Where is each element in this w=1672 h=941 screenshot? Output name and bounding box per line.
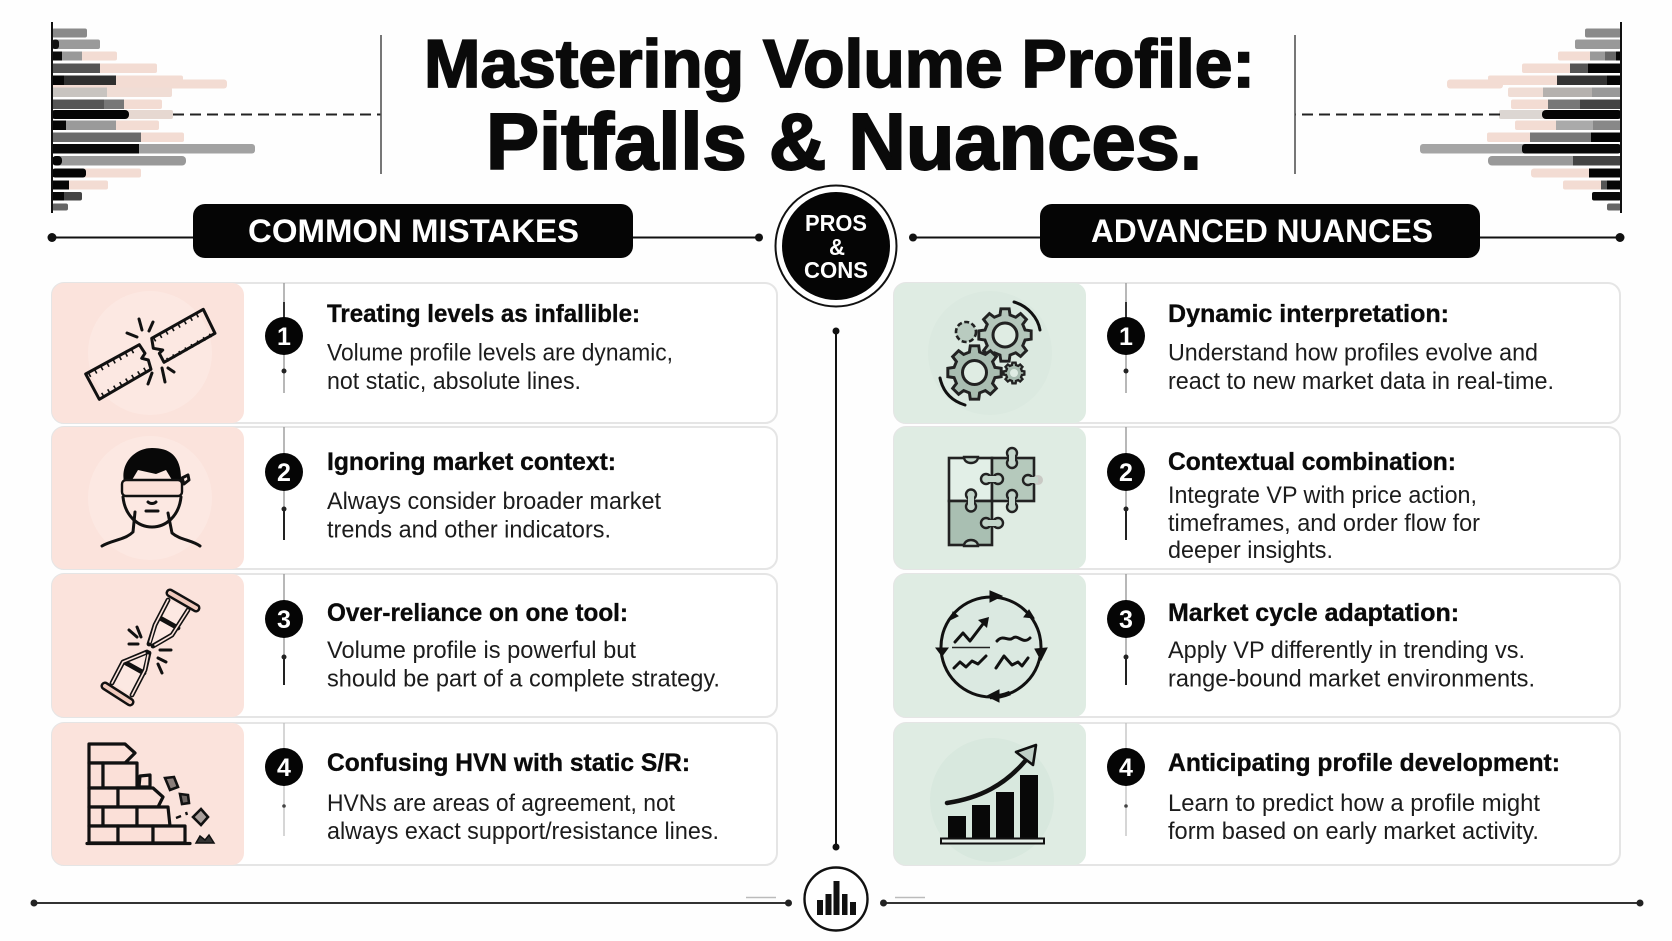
text: mistake 4: always exact support/resistance lines.: [327, 818, 719, 845]
text: mistake 1: Volume profile levels are dynamic,: [327, 340, 673, 366]
badge: pros and cons: [776, 186, 896, 306]
text: mistake 1: [327, 300, 673, 395]
title: Mastering Volume Profile:: [424, 26, 1255, 102]
icon: footer volume bars: [804, 868, 868, 930]
text: mistake 1: not static, absolute lines.: [327, 368, 581, 395]
text: nuance 1: Dynamic interpretation:: [1168, 300, 1449, 328]
text: mistake 3: should be part of a complete strategy.: [327, 666, 720, 692]
centre vertical divider: [832, 328, 840, 850]
icon: gears: [928, 291, 1052, 415]
text: nuance 1: Understand how profiles evolve and: [1168, 340, 1538, 366]
text: nuance 2: [1168, 448, 1480, 564]
panel: nuance 3: [894, 574, 1620, 717]
text: mistake 4: HVNs are areas of agreement, not: [327, 790, 675, 817]
panel: nuance 4: [894, 723, 1620, 865]
number 4: 4: [277, 754, 291, 782]
icon: broken crutch: [105, 593, 196, 702]
footer rule: right: [880, 898, 1644, 906]
title: [424, 26, 1255, 186]
number 2: 2: [277, 459, 291, 487]
icon: puzzle pieces: [949, 448, 1043, 546]
badge: pros and cons: &: [829, 234, 845, 260]
text: mistake 3: [327, 599, 720, 692]
text: nuance 3: range-bound market environments.: [1168, 666, 1535, 692]
text: nuance 3: Market cycle adaptation:: [1168, 599, 1459, 627]
icon: blindfolded head: [88, 436, 212, 560]
number 3: [265, 574, 303, 685]
panel: nuance 1: [894, 283, 1620, 423]
text: nuance 2: Integrate VP with price action,: [1168, 482, 1477, 509]
number 3: [1107, 574, 1145, 685]
volume profile chart: right: [1420, 22, 1622, 213]
text: nuance 2: deeper insights.: [1168, 537, 1333, 564]
icon: crumbling wall: [87, 744, 214, 844]
number 2: 2: [1119, 459, 1133, 487]
text: nuance 2: Contextual combination:: [1168, 448, 1456, 476]
text: nuance 4: Learn to predict how a profile might: [1168, 790, 1540, 817]
footer rule: left: [30, 898, 792, 906]
icon: broken ruler: [86, 291, 215, 415]
number 2: [265, 427, 303, 540]
number 1: [1107, 283, 1145, 393]
text: mistake 3: Volume profile is powerful but: [327, 637, 636, 664]
connector: right heading rule: [909, 233, 1624, 242]
number 3: 3: [277, 606, 291, 634]
number 2: [1107, 427, 1145, 540]
connector: left heading rule: [48, 233, 763, 242]
text: nuance 2: timeframes, and order flow for: [1168, 510, 1480, 537]
panel: mistake 4: [52, 723, 777, 865]
text: mistake 2: Ignoring market context:: [327, 448, 616, 476]
panel: nuance 2: [894, 427, 1620, 569]
number 4: 4: [1119, 754, 1133, 782]
text: nuance 4: Anticipating profile development:: [1168, 749, 1560, 777]
number 3: 3: [1119, 606, 1133, 634]
number 1: 1: [1119, 323, 1133, 351]
volume profile chart: left: [51, 22, 255, 213]
text: mistake 2: trends and other indicators.: [327, 516, 611, 544]
text: mistake 1: Treating levels as infallible:: [327, 300, 640, 328]
text: nuance 4: form based on early market activity.: [1168, 818, 1539, 845]
text: nuance 1: react to new market data in real-time.: [1168, 368, 1554, 395]
text: mistake 4: [327, 749, 719, 845]
icon: market cycle: [936, 591, 1047, 702]
number 1: 1: [277, 323, 291, 351]
text: nuance 3: Apply VP differently in trending vs.: [1168, 637, 1525, 664]
heading: common mistakes: COMMON MISTAKES: [248, 213, 579, 249]
text: mistake 2: Always consider broader market: [327, 488, 661, 515]
heading: advanced nuances: ADVANCED NUANCES: [1091, 213, 1433, 249]
number 1: [265, 283, 303, 393]
panel: mistake 1: [52, 283, 777, 423]
dashed POC line and separator: right: [1295, 35, 1500, 174]
panel: mistake 2: [52, 427, 777, 569]
heading: advanced nuances: [1040, 204, 1480, 258]
text: nuance 4: [1168, 749, 1560, 845]
number 4: [265, 723, 303, 836]
text: mistake 2: [327, 448, 661, 544]
number 4: [1107, 723, 1145, 836]
panel: mistake 3: [52, 574, 777, 717]
text: nuance 3: [1168, 599, 1535, 692]
text: mistake 4: Confusing HVN with static S/R:: [327, 749, 690, 777]
icon: growth chart: [930, 738, 1054, 862]
heading: common mistakes: [193, 204, 633, 258]
dashed POC line and separator: left: [173, 35, 381, 174]
badge: pros and cons: PROS: [805, 210, 867, 236]
badge: pros and cons: CONS: [804, 257, 868, 283]
text: mistake 3: Over-reliance on one tool:: [327, 599, 628, 627]
title: Pitfalls & Nuances.: [486, 97, 1202, 186]
text: nuance 1: [1168, 300, 1554, 395]
